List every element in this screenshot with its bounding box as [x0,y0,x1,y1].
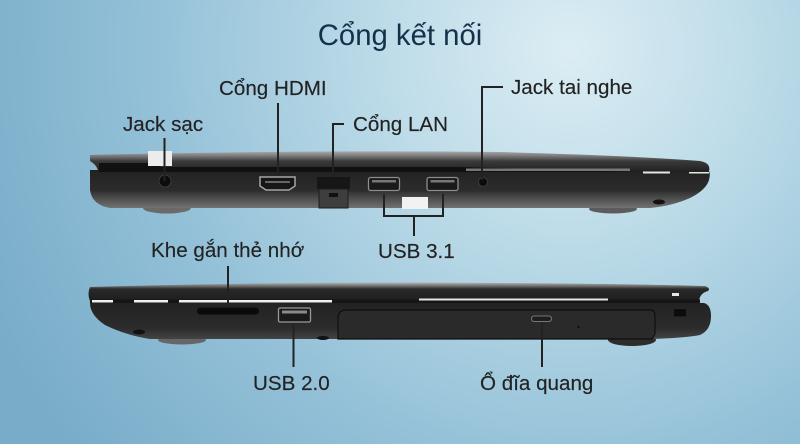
screw hole [133,330,145,334]
leader line [227,266,229,305]
label: Jack sạc: Jack sạc [123,113,203,136]
gap highlight [466,168,630,171]
drive pinhole [578,326,580,328]
rubber foot right [608,334,656,346]
USB port 2 tongue [430,180,454,182]
USB 2.0 tongue [282,310,307,314]
laptop lid [90,151,709,171]
LAN flap notch [329,193,338,197]
label: Ổ đĩa quang: Ổ đĩa quang [480,371,593,395]
hinge gap [99,163,640,172]
label: Cổng LAN: Cổng LAN [353,113,448,136]
headphone jack port [478,178,488,186]
charging jack port [159,175,171,187]
HDMI port [260,177,295,190]
USB 2.0 port [278,308,310,322]
screw hole [653,200,665,204]
leader line [482,87,503,180]
USB port 2 [427,178,458,190]
USB port 1 tongue [372,180,396,182]
memory card slot [197,308,259,314]
laptop base [90,170,710,208]
laptop: bottom side view [88,282,711,346]
label: Khe gắn thẻ nhớ: Khe gắn thẻ nhớ [151,239,304,262]
label: Cổng HDMI [219,77,327,176]
white reflection in gap [148,151,172,166]
rubber foot left [143,202,191,214]
screw hole right [317,336,329,340]
leader line [333,124,344,177]
white gap strip left [92,300,332,302]
black gap [90,300,700,303]
label: Jack tai nghe: Jack tai nghe [511,76,632,99]
bracket [384,194,443,236]
leader line [277,103,279,176]
label: USB 2.0 [253,323,330,395]
laptop base [90,303,711,339]
label: USB 3.1 [378,194,455,263]
LAN port [317,177,350,189]
title: Cổng kết nối [318,19,482,52]
rubber foot left [158,336,206,344]
leader line [164,138,166,181]
USB port 1 [368,178,400,190]
white gap strip right [419,293,679,300]
label: Cổng HDMI: Cổng HDMI [219,77,327,100]
leader line [541,322,543,367]
white patch [402,197,428,209]
label: Jack tai nghe [482,76,632,180]
eject button [532,316,552,322]
lock slot [674,309,686,316]
optical drive tray [338,310,655,339]
rubber foot right [589,204,637,214]
label: Cổng LAN [333,113,448,177]
HDMI inner stripe [265,181,290,183]
leader line [292,323,294,367]
laptop lid [88,282,709,301]
LAN flap [319,189,348,208]
laptop: top side view [90,151,710,214]
label: USB 2.0: USB 2.0 [253,372,330,395]
label: Jack sạc [123,113,203,181]
right gap highlights [643,172,670,174]
label: Ổ đĩa quang [480,322,593,395]
label: USB 3.1: USB 3.1 [378,240,455,263]
